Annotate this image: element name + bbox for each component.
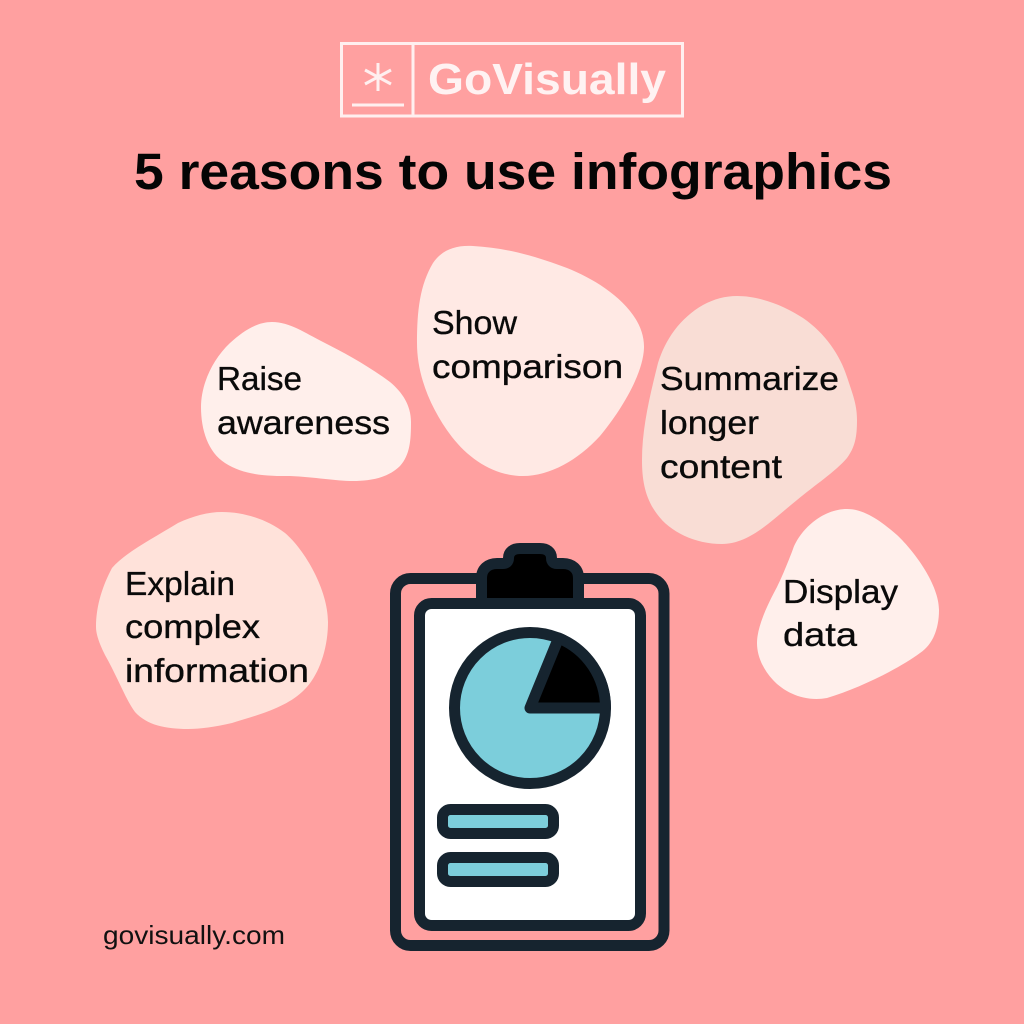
- clip: [482, 548, 578, 604]
- bubble: Raise awareness: Raise: [217, 360, 302, 397]
- clipboard board: [396, 578, 664, 946]
- bubble: Summarize longer content: content: [660, 448, 782, 485]
- title: 5 reasons to use infographics: [134, 143, 892, 200]
- bubble: Explain complex information: Explain: [125, 565, 235, 602]
- paper sheet: [420, 604, 640, 926]
- text bar 2: [442, 858, 554, 882]
- bubble: Summarize longer content: Summarize: [660, 360, 839, 397]
- bubble: Display data: Display: [783, 573, 899, 610]
- bubble: Summarize longer content: [642, 296, 857, 544]
- bubble: Display data: data: [783, 616, 858, 653]
- bubble: Show comparison: comparison: [432, 348, 623, 385]
- logo: GoVisually: [342, 44, 682, 116]
- pie chart: [454, 632, 606, 784]
- bubble: Raise awareness: [201, 322, 411, 481]
- text bar 1: [442, 810, 554, 834]
- bubble: Show comparison: [417, 246, 644, 476]
- website url: govisually.com: [103, 920, 285, 950]
- bubble: Summarize longer content: longer: [660, 404, 759, 441]
- bubble: Show comparison: Show: [432, 304, 517, 341]
- bubble: Display data: [757, 509, 939, 699]
- bubble: Explain complex information: information: [125, 652, 309, 689]
- bubble: Explain complex information: [96, 512, 328, 729]
- bubble: Raise awareness: awareness: [217, 404, 390, 441]
- bubble: Explain complex information: complex: [125, 608, 261, 645]
- logo: GoVisually: GoVisually: [428, 55, 667, 104]
- icon: clipboard with pie chart: [396, 548, 664, 946]
